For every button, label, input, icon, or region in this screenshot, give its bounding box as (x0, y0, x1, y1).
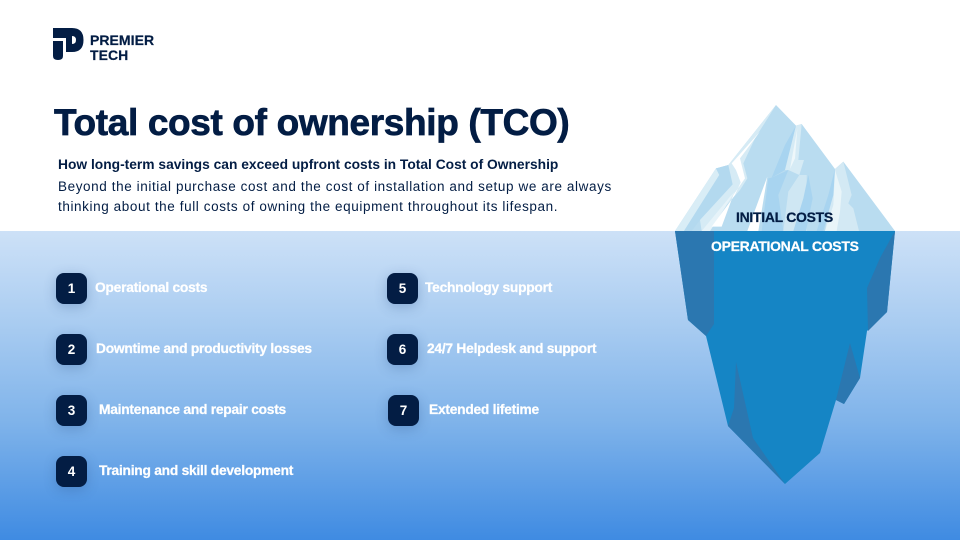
shaded facets (675, 231, 714, 336)
iceberg tip above water (675, 105, 895, 231)
list item 2: Downtime and productivity losses (96, 341, 312, 356)
list item 3 (52, 394, 286, 433)
list item 6: 6 (399, 342, 406, 357)
iceberg body under water (675, 231, 895, 484)
list item 5: Technology support (425, 280, 552, 295)
list item 1: 1 (68, 281, 75, 296)
list item 7: 7 (400, 403, 407, 418)
list item 7: Extended lifetime (429, 402, 539, 417)
list item 2 (52, 332, 312, 372)
list item 6: 24/7 Helpdesk and support (427, 341, 596, 356)
list item 7 (384, 394, 539, 433)
list item 2: 2 (68, 342, 75, 357)
list item 4 (52, 455, 294, 493)
list item 4: 4 (68, 464, 75, 479)
description: Beyond the initial purchase cost and the cost of installation and setup we are always (58, 178, 612, 194)
description (58, 178, 612, 214)
label: initial costs: INITIAL COSTS (736, 209, 833, 225)
subtitle: How long-term savings can exceed upfront costs in Total Cost of Ownership (58, 157, 558, 172)
list item 4: Training and skill development (99, 463, 293, 478)
logo: Premier Tech: PREMIER (90, 32, 154, 48)
list item 5 (382, 270, 552, 312)
list item 3: 3 (68, 403, 75, 418)
intro text (58, 157, 612, 214)
water background (0, 231, 960, 540)
logo: Premier Tech (53, 28, 154, 62)
description: thinking about the full costs of owning the equipment throughout its lifespan. (58, 199, 558, 214)
list item 5: 5 (399, 281, 406, 296)
label: operational costs: OPERATIONAL COSTS (711, 238, 859, 254)
list item 1 (50, 270, 208, 312)
title: Total cost of ownership (TCO) (54, 102, 569, 143)
logo: Premier Tech: TECH (90, 46, 128, 62)
list item 3: Maintenance and repair costs (99, 402, 286, 417)
list item 1: Operational costs (95, 280, 207, 295)
list item 6 (382, 332, 597, 372)
